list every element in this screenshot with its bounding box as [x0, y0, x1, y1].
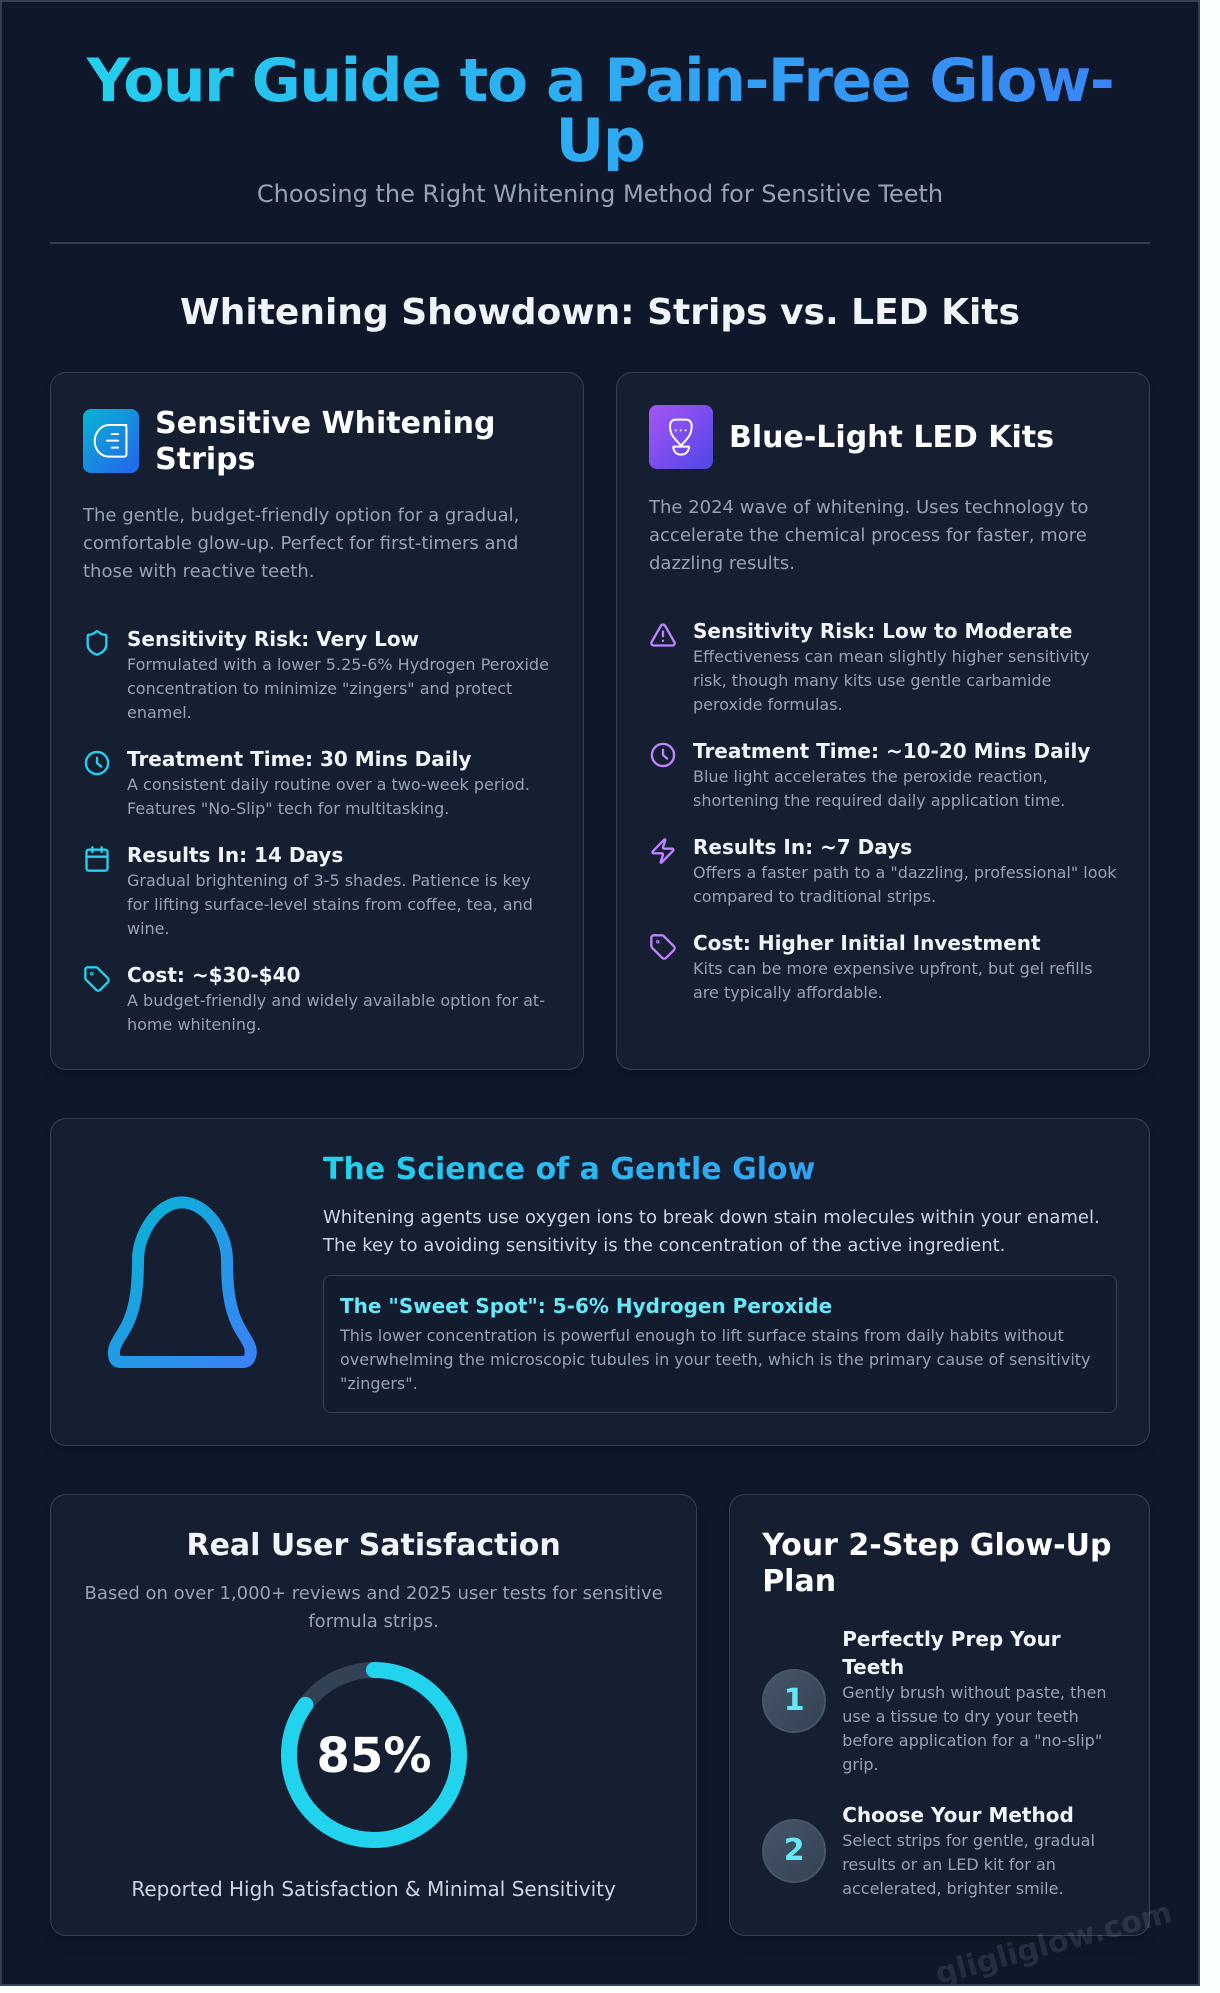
donut chart: 85% — [281, 1662, 467, 1848]
feature: treatment time — [650, 739, 1090, 810]
strips feature list — [84, 627, 549, 1034]
feature: results: Results In: ~7 Days — [693, 835, 912, 859]
step 1: 1 — [784, 1683, 805, 1718]
feature: sensitivity risk — [650, 619, 1090, 714]
feature: results: Results In: 14 Days — [127, 843, 343, 867]
feature: cost: Cost: Higher Initial Investment — [693, 931, 1041, 955]
panel: real user satisfaction — [50, 1494, 697, 1936]
feature: sensitivity risk — [86, 627, 549, 722]
feature: treatment time: Treatment Time: ~10-20 Mins Daily — [693, 739, 1090, 763]
science text: Whitening agents use oxygen ions to break down stain molecules within your enamel. The key to avoiding sensitivity is the concentration of the active ingredient. — [323, 1207, 1100, 1256]
LED description: The 2024 wave of whitening. Uses technology to accelerate the chemical process for faster, more dazzling results. — [649, 497, 1088, 574]
step 1: Gently brush without paste, then use a tissue to dry your teeth before application for a "no-slip" grip. — [842, 1683, 1106, 1774]
feature: cost: Kits can be more expensive upfront, but gel refills are typically affordable. — [693, 959, 1093, 1002]
feature: sensitivity risk: Sensitivity Risk: Low to Moderate — [693, 619, 1072, 643]
satisfaction text: Based on over 1,000+ reviews and 2025 user tests for sensitive formula strips. — [84, 1583, 663, 1632]
science heading — [323, 1152, 1117, 1188]
strips card header — [83, 406, 495, 477]
step 2 — [762, 1803, 1095, 1898]
step 1: Perfectly Prep Your Teeth — [842, 1627, 1061, 1679]
feature: sensitivity risk: Formulated with a lower 5.25-6% Hydrogen Peroxide concentration to minimize "zingers" and protect enamel. — [127, 655, 549, 722]
LED feature list — [650, 619, 1117, 1002]
feature: treatment time: Blue light accelerates the peroxide reaction, shortening the required daily application time. — [693, 767, 1065, 810]
panel: sensitive whitening strips — [50, 372, 584, 1070]
comparison row — [50, 372, 1150, 1070]
icon: tooth outline — [108, 1196, 257, 1368]
step 2: 2 — [784, 1833, 805, 1868]
science heading: The Science of a Gentle Glow — [323, 1152, 815, 1187]
feature: results — [651, 835, 1117, 906]
callout: sweet spot: The "Sweet Spot": 5-6% Hydrogen Peroxide — [340, 1294, 832, 1318]
heading: whitening showdown: Whitening Showdown: Strips vs. LED Kits — [180, 292, 1020, 333]
strips card title: Sensitive Whitening Strips — [155, 406, 495, 477]
step 2: Choose Your Method — [842, 1803, 1074, 1827]
callout: sweet spot: This lower concentration is powerful enough to lift surface stains from daily habits without overwhelming the microscopic tubules in your teeth, which is the primary cause of sensitivity "zingers". — [340, 1326, 1091, 1393]
feature: sensitivity risk: Sensitivity Risk: Very Low — [127, 627, 419, 651]
step 1 — [762, 1627, 1106, 1774]
satisfaction heading: Real User Satisfaction — [186, 1528, 561, 1563]
feature: results: Gradual brightening of 3-5 shades. Patience is key for lifting surface-level stains from coffee, tea, and wine. — [127, 871, 533, 938]
feature: sensitivity risk: Effectiveness can mean slightly higher sensitivity risk, though many kits use gentle carbamide peroxide formulas. — [693, 647, 1090, 714]
header — [50, 50, 1150, 244]
plan heading: Your 2-Step Glow-Up Plan — [762, 1528, 1111, 1599]
panel: the science of a gentle glow — [50, 1118, 1150, 1446]
title: Your Guide to a Pain-Free Glow-Up — [87, 46, 1113, 176]
feature: treatment time — [84, 747, 530, 818]
feature: cost: Cost: ~$30-$40 — [127, 963, 300, 987]
panel: 2-step plan — [729, 1494, 1150, 1936]
bottom row — [50, 1494, 1150, 1936]
feature: results: Offers a faster path to a "dazzling, professional" look compared to traditional strips. — [693, 863, 1117, 906]
feature: treatment time: Treatment Time: 30 Mins Daily — [127, 747, 471, 771]
feature: results — [85, 843, 533, 938]
feature: treatment time: A consistent daily routine over a two-week period. Features "No-Slip" tech for multitasking. — [127, 775, 530, 818]
steps list — [762, 1627, 1106, 1898]
feature: cost: A budget-friendly and widely available option for at-home whitening. — [127, 991, 545, 1034]
feature: cost — [84, 963, 545, 1034]
callout: sweet spot — [323, 1275, 1117, 1413]
panel: blue-light LED kits — [616, 372, 1150, 1070]
chart caption: Reported High Satisfaction & Minimal Sensitivity — [131, 1877, 616, 1901]
LED card header — [649, 405, 1054, 469]
feature: cost — [650, 931, 1093, 1002]
icon: whitening strip — [83, 409, 139, 473]
donut chart: 85%: 85% — [316, 1728, 431, 1784]
icon: LED device — [649, 405, 713, 469]
subtitle: Choosing the Right Whitening Method for Sensitive Teeth — [257, 180, 943, 208]
LED card title: Blue-Light LED Kits — [729, 420, 1054, 455]
strips description: The gentle, budget-friendly option for a gradual, comfortable glow-up. Perfect for first-timers and those with reactive teeth. — [83, 505, 519, 582]
step 2: Select strips for gentle, gradual results or an LED kit for an accelerated, brighter smile. — [842, 1831, 1095, 1898]
